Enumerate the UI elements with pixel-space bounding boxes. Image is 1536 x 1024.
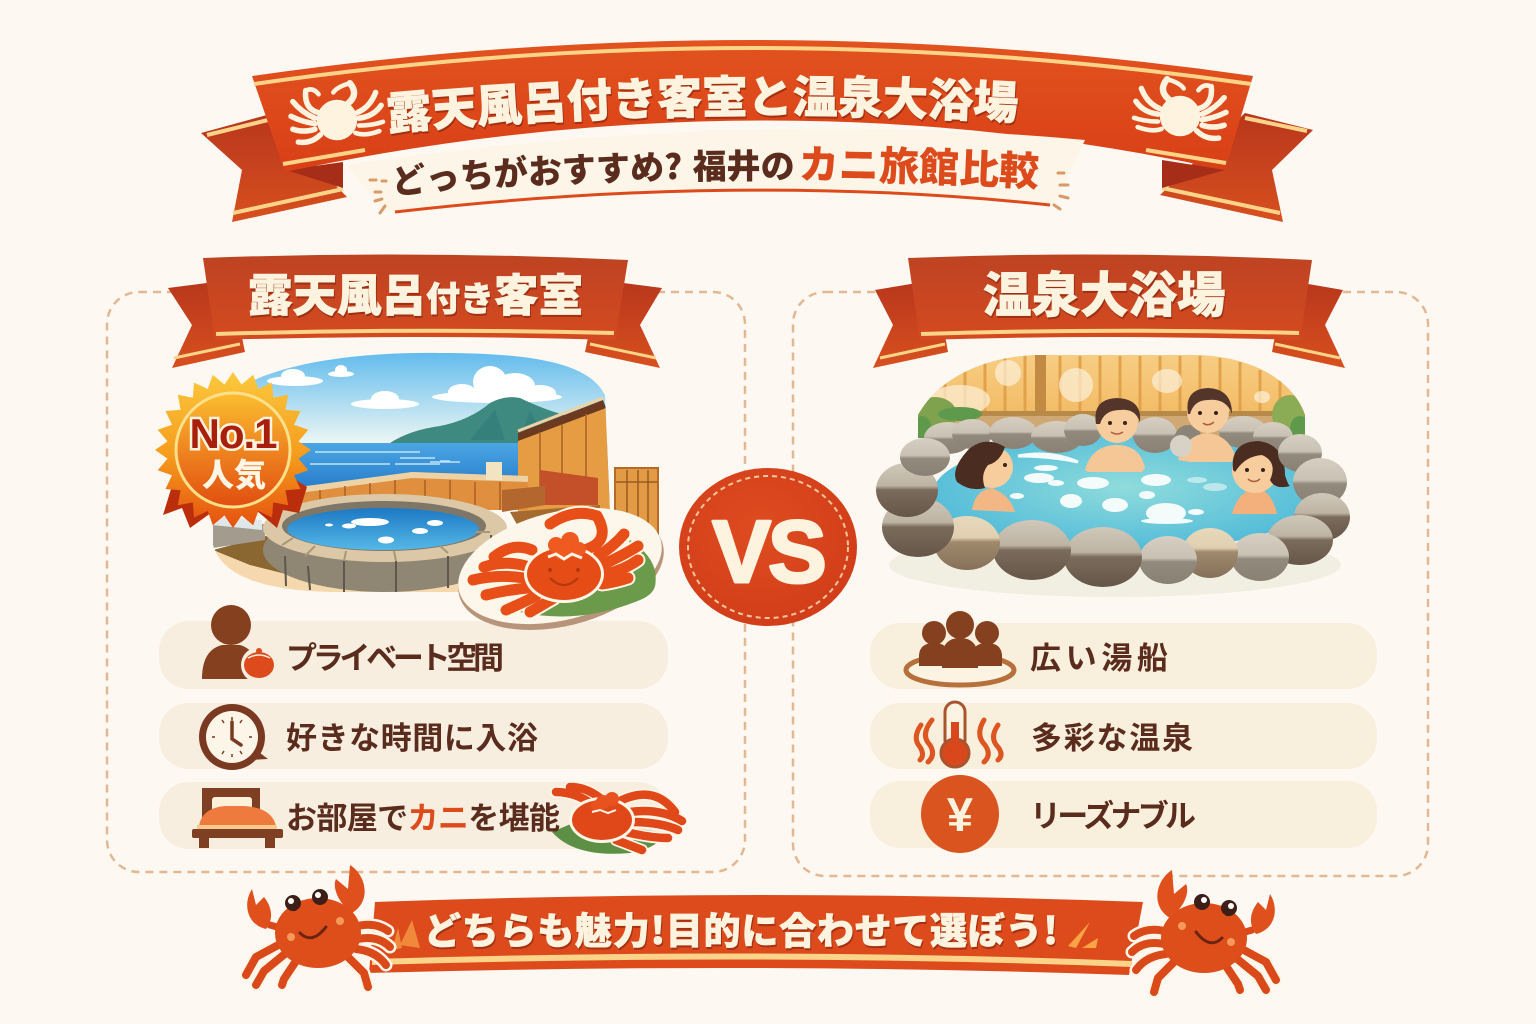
- bushes: [918, 397, 956, 426]
- icon: cream crab right: [1134, 79, 1226, 138]
- icon: cartoon crab left: [246, 865, 390, 987]
- left panel heading ribbon: [168, 254, 662, 368]
- bather: back right: [1170, 388, 1235, 462]
- badge sublabel: 人気: [202, 450, 266, 496]
- subtitle text: どっちがおすすめ? 福井のカニ旅館比較: [396, 146, 1038, 195]
- terrace wall: [299, 472, 528, 510]
- mountain: [390, 397, 565, 443]
- icon: clock: [199, 704, 268, 770]
- VS text: VS: [712, 502, 824, 601]
- icon: cartoon crab right: [1132, 870, 1276, 992]
- label: 広い湯船: [1030, 633, 1168, 678]
- stone tub: [263, 508, 507, 592]
- bottom banner: [369, 895, 1143, 975]
- feature row: reasonable price: [870, 775, 1377, 853]
- label: 多彩な温泉: [1031, 713, 1193, 758]
- foam: [1010, 454, 1227, 524]
- banner text: どちらも魅力!目的に合わせて選ぼう!: [424, 901, 1058, 955]
- badge: No.1 popularity: [155, 372, 311, 528]
- icon: bed: [192, 788, 283, 848]
- foam: [325, 518, 443, 544]
- label: リーズナブル: [1030, 791, 1196, 836]
- back rocks: [924, 414, 1293, 455]
- accent marks right: [1068, 922, 1098, 948]
- label: お部屋でカニを堪能: [286, 793, 560, 838]
- panel: public baths: [793, 292, 1428, 876]
- steam: [930, 360, 1270, 415]
- bather: left woman: [955, 442, 1015, 512]
- bather: right woman: [1232, 441, 1290, 514]
- right feature list: [870, 610, 1377, 853]
- badge ribbons: [163, 468, 222, 528]
- fence: [518, 402, 612, 512]
- right ribbon tail: [1160, 113, 1313, 222]
- bench: [540, 470, 598, 505]
- icon: cream crab left: [291, 83, 383, 142]
- feature row: large bath: [870, 610, 1377, 689]
- accent dashes right: [1054, 173, 1068, 209]
- badge label: No.1: [189, 410, 277, 457]
- icon: group in bath: [906, 610, 1014, 685]
- label: 好きな時間に入浴: [286, 713, 538, 758]
- feature row: variety of springs: [870, 702, 1377, 769]
- panel: private rooms: [107, 292, 745, 872]
- accent marks left: [392, 920, 420, 950]
- label: プライベート空間: [286, 633, 504, 678]
- illustration: open-air bath with ocean view: [213, 352, 610, 592]
- plate with crab: [446, 488, 676, 650]
- feature row: crab in room: [159, 782, 682, 854]
- accent dashes left: [370, 180, 386, 213]
- icon: yen coin: [921, 775, 999, 853]
- icon: crab on leaf: [552, 787, 682, 854]
- feature row: bath any time: [159, 703, 668, 770]
- heading text: 露天風呂付き客室: [248, 259, 583, 324]
- sea: [294, 443, 610, 503]
- gate: [615, 468, 658, 540]
- main ribbon: [252, 40, 1253, 172]
- right panel heading ribbon: [873, 254, 1345, 368]
- VS emblem: [679, 468, 857, 626]
- title text: 露天風呂付き客室と温泉大浴場: [387, 74, 1019, 136]
- icon: person with pot: [202, 605, 277, 683]
- clouds: [267, 365, 562, 409]
- bather: back left: [1085, 398, 1145, 472]
- subtitle strip: [346, 128, 1085, 212]
- subtitle underline: [395, 190, 1050, 212]
- heading text: 温泉大浴場: [983, 256, 1226, 326]
- icon: thermometer and steam: [916, 702, 1001, 767]
- icon: yen coin: ¥: [947, 788, 973, 841]
- left feature list: [159, 605, 682, 854]
- title banner: [201, 40, 1313, 222]
- feature row: private space: [159, 605, 668, 689]
- water: [933, 435, 1321, 551]
- illustration: communal hot spring: [876, 350, 1350, 597]
- ground: [216, 552, 458, 592]
- front rocks: [876, 434, 1350, 587]
- left ribbon tail: [201, 115, 347, 222]
